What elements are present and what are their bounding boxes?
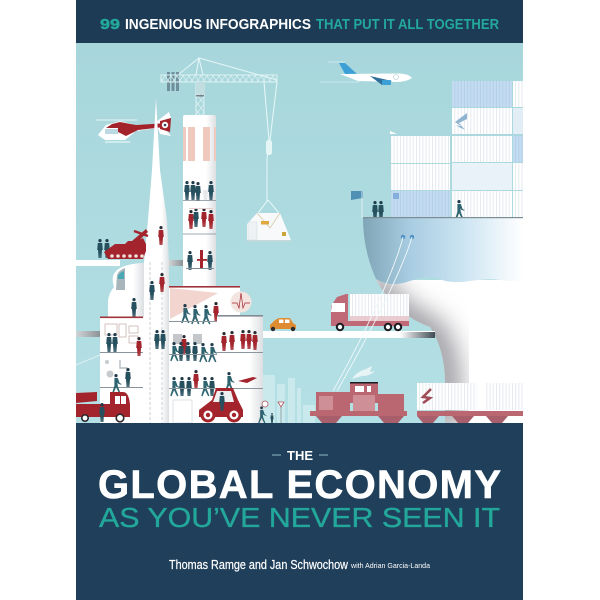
right floor person bbox=[225, 372, 235, 391]
title: THE: THE bbox=[287, 449, 313, 463]
subtitle: AS YOU’VE NEVER SEEN IT bbox=[99, 502, 500, 533]
cabin windows bbox=[105, 129, 118, 134]
left building bbox=[100, 316, 144, 423]
locomotive bbox=[310, 382, 407, 423]
tail rotor bbox=[160, 118, 171, 132]
dome slot bbox=[116, 268, 125, 290]
upper hull bbox=[363, 218, 523, 284]
banner white text: INGENIOUS INFOGRAPHICS bbox=[125, 17, 311, 33]
crane bbox=[161, 58, 279, 213]
wing bbox=[370, 76, 392, 85]
helicopter bbox=[96, 112, 171, 142]
speed lines bbox=[320, 62, 360, 82]
fuselage bbox=[340, 74, 412, 82]
left platform bbox=[76, 260, 120, 266]
observatory dome bbox=[108, 263, 144, 317]
tank wheels bbox=[110, 254, 144, 258]
gallery wall bbox=[105, 324, 138, 343]
middle building bbox=[169, 286, 240, 423]
crane jib bbox=[161, 75, 277, 82]
hanging lines from anchors bbox=[333, 237, 412, 391]
bottom title panel bbox=[76, 423, 523, 600]
tail fin bbox=[156, 112, 171, 136]
deck line bbox=[363, 217, 523, 218]
military tank bbox=[97, 229, 148, 259]
fuselage bbox=[98, 121, 158, 140]
upper level extension bbox=[217, 287, 240, 316]
red team bbox=[221, 330, 258, 351]
right building bbox=[217, 292, 263, 423]
tower people meeting bbox=[184, 181, 214, 201]
fire engine bbox=[76, 392, 130, 422]
left stub bbox=[76, 331, 100, 337]
skid bbox=[105, 141, 130, 143]
container logo bbox=[455, 113, 467, 130]
title: THE bbox=[272, 449, 328, 463]
banner teal text: THAT PUT IT ALL TOGETHER bbox=[316, 17, 499, 33]
tower red group bbox=[188, 208, 214, 229]
crane mast bbox=[196, 82, 204, 116]
audience row bbox=[181, 302, 219, 324]
pedestrians with road signs bbox=[258, 401, 284, 423]
top banner bbox=[76, 0, 523, 43]
far-left diagonal mark bbox=[76, 355, 100, 365]
banner number 99: 99 bbox=[100, 16, 120, 33]
second crowd bbox=[170, 370, 215, 396]
lab people bbox=[112, 368, 131, 393]
rotor bbox=[96, 119, 137, 121]
needle spire bbox=[144, 98, 169, 423]
gallery visitors bbox=[106, 333, 142, 356]
title: GLOBAL ECONOMY: GLOBAL ECONOMY bbox=[98, 463, 501, 507]
loco hood bbox=[316, 392, 350, 411]
loco cab bbox=[350, 383, 378, 403]
ship hull bbox=[363, 217, 523, 430]
authors: Thomas Ramge and Jan Schwochow bbox=[169, 558, 349, 572]
roof bar bbox=[169, 286, 240, 288]
container stacks bbox=[391, 81, 523, 218]
tower pink stripes bbox=[183, 127, 186, 161]
spire climbers bbox=[149, 226, 166, 349]
patient bed bbox=[238, 377, 257, 383]
illustration sky bbox=[76, 43, 523, 423]
chart bubble bbox=[230, 292, 252, 312]
tower table meeting bbox=[186, 250, 214, 270]
fire engine wheels bbox=[82, 414, 124, 422]
pink projection bbox=[170, 288, 218, 319]
truck wheels bbox=[337, 324, 401, 330]
sling bbox=[258, 200, 279, 213]
co-author: with Adrian Garcia-Landa bbox=[350, 561, 431, 570]
tall tower bbox=[183, 115, 216, 287]
anchor holes bbox=[401, 235, 405, 239]
crane hoist lines bbox=[264, 82, 277, 202]
road roller bbox=[199, 388, 243, 422]
lower hull shading bbox=[370, 278, 446, 430]
ladder on spire bbox=[150, 262, 162, 423]
book cover background bbox=[76, 0, 523, 600]
lower hull bbox=[376, 280, 523, 423]
cargo envelope load bbox=[247, 213, 291, 242]
tank gun bbox=[132, 229, 148, 243]
middle floor windows bbox=[173, 334, 202, 344]
train wagons bbox=[417, 383, 523, 423]
tower body bbox=[183, 115, 216, 287]
deck people bbox=[372, 200, 465, 220]
lab machine bbox=[105, 360, 127, 378]
airplane bbox=[320, 62, 412, 85]
crane cables bbox=[179, 58, 277, 80]
crane counterweight bbox=[167, 72, 179, 91]
city skyline bbox=[263, 375, 315, 423]
connecting stub to tower bbox=[169, 260, 183, 266]
crane cab bbox=[196, 82, 205, 94]
locomotive smoke bbox=[352, 366, 375, 379]
road bridge bbox=[263, 331, 435, 338]
ship bow flag bbox=[351, 131, 397, 218]
ground door bbox=[173, 400, 192, 423]
truck bbox=[331, 294, 409, 330]
trailer bbox=[350, 294, 409, 322]
crane hook block bbox=[266, 140, 272, 155]
tank hull bbox=[104, 238, 146, 259]
bogies bbox=[316, 416, 404, 423]
dancing crowd bbox=[170, 335, 218, 362]
orange car bbox=[270, 318, 296, 331]
cab bbox=[331, 294, 348, 326]
tail bbox=[339, 63, 357, 74]
